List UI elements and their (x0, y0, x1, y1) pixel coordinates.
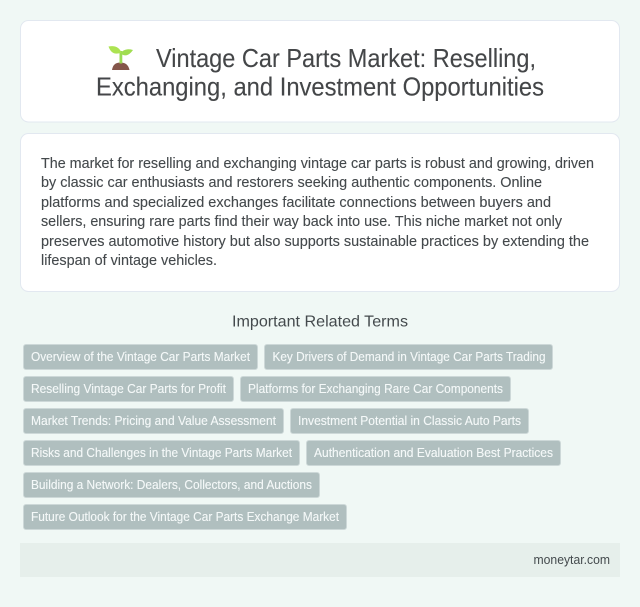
text block: description: The market for reselling and exchanging vintage car parts is robust and growing, driven (41, 155, 594, 172)
tag (290, 408, 528, 434)
text block: description: sellers, ensuring rare parts find their way back into use. This niche market not only (41, 213, 562, 230)
panel: title card (20, 20, 620, 122)
icon: seedling (108, 46, 133, 70)
panel: description card (20, 134, 620, 292)
title: Exchanging, and Investment Opportunities (96, 72, 544, 102)
title (96, 43, 544, 102)
tag (24, 472, 320, 498)
text block: description (41, 155, 594, 269)
tag (24, 440, 300, 466)
tag: Risks and Challenges in the Vintage Parts Market (31, 446, 292, 460)
tag: Investment Potential in Classic Auto Parts (298, 414, 521, 428)
tag list (24, 344, 560, 530)
title: Vintage Car Parts Market: Reselling, (156, 43, 536, 73)
tag: Market Trends: Pricing and Value Assessment (31, 414, 277, 428)
footer: moneytar.com (534, 553, 610, 567)
tag (24, 504, 346, 530)
footer (20, 543, 620, 577)
tag: Authentication and Evaluation Best Practices (314, 446, 553, 460)
tag (24, 408, 284, 434)
tag (24, 376, 234, 402)
tag (306, 440, 560, 466)
text block: description: by classic car enthusiasts and restorers seeking authentic components. Online (41, 174, 542, 191)
text block: description: lifespan of vintage vehicles. (41, 252, 217, 269)
text block: description: preserves automotive history but also supports sustainable practices by extending the (41, 233, 589, 250)
tag (240, 376, 510, 402)
heading: related terms: Important Related Terms (232, 314, 408, 330)
tag (264, 344, 552, 370)
tag (24, 344, 258, 370)
tag: Overview of the Vintage Car Parts Market (31, 350, 250, 364)
tag: Key Drivers of Demand in Vintage Car Parts Trading (272, 350, 546, 364)
tag: Building a Network: Dealers, Collectors, and Auctions (31, 478, 312, 492)
tag: Platforms for Exchanging Rare Car Components (248, 382, 503, 396)
tag: Reselling Vintage Car Parts for Profit (31, 382, 227, 396)
tag: Future Outlook for the Vintage Car Parts Exchange Market (31, 510, 339, 524)
text block: description: platforms and specialized exchanges facilitate connections between buyers and (41, 194, 551, 211)
